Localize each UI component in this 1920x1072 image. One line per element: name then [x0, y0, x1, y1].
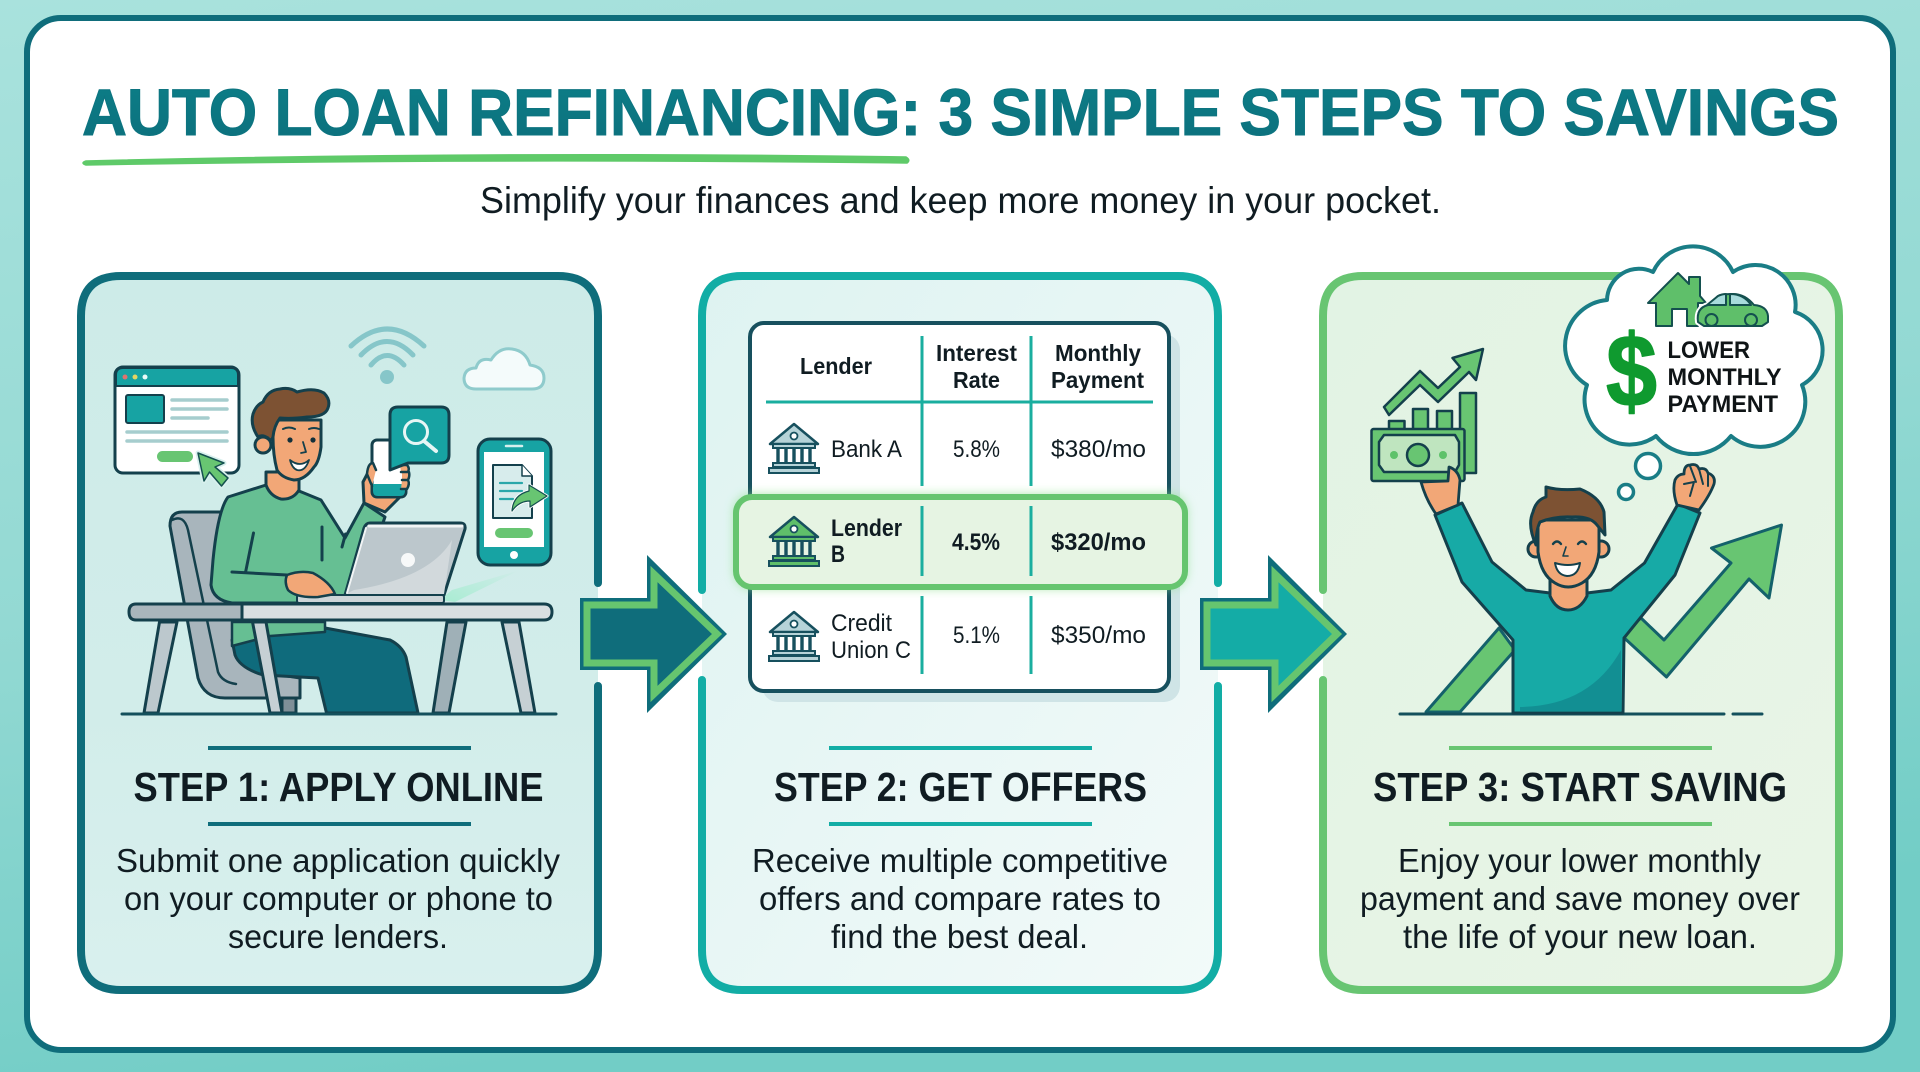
dollar sign: $	[1606, 314, 1657, 428]
icon: house	[1648, 273, 1706, 326]
step 2 heading: STEP 2: GET OFFERS	[774, 764, 1147, 810]
row glow	[734, 494, 1187, 589]
raised hand with money	[1421, 467, 1460, 514]
cloud text: MONTHLY	[1668, 364, 1782, 391]
step 2 body: offers and compare rates to	[759, 880, 1161, 917]
row: Credit Union C: $350/mo	[1051, 622, 1146, 649]
step 3 body: Enjoy your lower monthly	[1398, 842, 1761, 879]
divider bottom	[208, 822, 471, 826]
man's torso	[232, 622, 325, 646]
row: Bank A: 5.8%	[953, 436, 1000, 463]
table header: Lender	[800, 353, 872, 379]
panel: step 3	[1323, 246, 1839, 990]
raised fist	[1674, 464, 1714, 510]
cloud text: PAYMENT	[1668, 391, 1778, 418]
sweater shading	[1520, 650, 1621, 711]
row: Lender B highlighted	[736, 497, 1185, 587]
divider top	[829, 746, 1092, 750]
table header: Interest	[936, 340, 1017, 366]
typing hand	[286, 572, 335, 597]
step 1 body: secure lenders.	[228, 918, 448, 955]
man's teal sweater	[1435, 503, 1700, 713]
title underline	[83, 155, 909, 165]
row: Bank A	[769, 424, 1146, 473]
cloud text: LOWER	[1668, 337, 1750, 364]
panel 2 border	[702, 276, 1218, 990]
row: Bank A: Bank A	[831, 436, 902, 463]
laptop glow	[440, 570, 520, 602]
step 2 body: Receive multiple competitive	[752, 842, 1168, 879]
illustration: celebrating man	[1372, 246, 1823, 714]
row: Credit Union C	[769, 610, 1146, 664]
divider top	[208, 746, 471, 750]
subtitle: Simplify your finances and keep more money in your pocket.	[480, 180, 1441, 221]
thought bubbles	[1636, 454, 1660, 478]
neck	[1550, 580, 1587, 610]
cloud text	[1668, 337, 1782, 418]
step 1 body: on your computer or phone to	[124, 880, 553, 917]
table header	[800, 340, 1144, 393]
small thought bubble	[1618, 484, 1634, 500]
row: Credit Union C: 5.1%	[953, 622, 1000, 649]
step 2 body: find the best deal.	[831, 918, 1088, 955]
man's legs	[232, 628, 418, 713]
illustration: person applying online	[115, 329, 556, 714]
step 1 heading: STEP 1: APPLY ONLINE	[134, 764, 544, 810]
icon: wifi	[351, 329, 424, 384]
divider bottom	[829, 822, 1092, 826]
row: Lender B highlighted: $320/mo	[1051, 529, 1146, 556]
big growth arrow	[1426, 525, 1782, 712]
thought cloud	[1565, 246, 1823, 454]
divider bottom	[1449, 822, 1712, 826]
table header: Rate	[953, 367, 1000, 393]
held phone and hand	[363, 440, 409, 512]
head	[1528, 487, 1609, 587]
step 3 body: payment and save money over	[1360, 880, 1800, 917]
icon: browser window	[115, 367, 239, 486]
panel 3 border	[1323, 276, 1839, 990]
step 3 body	[1360, 842, 1800, 955]
row: Lender B highlighted: Lender	[831, 515, 902, 542]
title: AUTO LOAN REFINANCING: 3 SIMPLE STEPS TO SAVINGS	[82, 75, 1839, 149]
laptop	[297, 523, 465, 603]
icon: phone with document	[478, 439, 551, 565]
panel: step 2	[702, 276, 1218, 990]
step 3 heading: STEP 3: START SAVING	[1373, 764, 1787, 810]
row: Credit Union C: Credit	[831, 610, 892, 637]
panel 1 border	[81, 276, 598, 990]
arrow: step 1 to step 2	[580, 555, 727, 713]
table header: Payment	[1051, 367, 1144, 393]
panel: step 1	[81, 276, 598, 990]
icon: money and chart	[1372, 349, 1483, 481]
row: Lender B highlighted: B	[831, 541, 845, 568]
icon: car	[1698, 294, 1768, 326]
table header: Monthly	[1055, 340, 1141, 366]
floor line	[122, 712, 556, 716]
row: Credit Union C: Union C	[831, 637, 911, 664]
chair	[170, 512, 300, 713]
icon: search card	[390, 407, 449, 470]
table grid lines	[766, 336, 1153, 674]
step 1 body	[116, 842, 560, 955]
lender comparison table	[734, 323, 1187, 702]
divider top	[1449, 746, 1712, 750]
step 2 body	[752, 842, 1168, 955]
row: Lender B highlighted: 4.5%	[952, 529, 1000, 556]
step 1 body: Submit one application quickly	[116, 842, 560, 879]
row: Bank A: $380/mo	[1051, 436, 1146, 463]
arrow: step 2 to step 3	[1200, 555, 1347, 713]
icon: cloud	[464, 349, 544, 389]
man's neck	[266, 472, 299, 499]
table	[129, 604, 552, 713]
step 3 body: the life of your new loan.	[1403, 918, 1757, 955]
man's head	[252, 388, 329, 480]
floor line	[1400, 712, 1762, 716]
